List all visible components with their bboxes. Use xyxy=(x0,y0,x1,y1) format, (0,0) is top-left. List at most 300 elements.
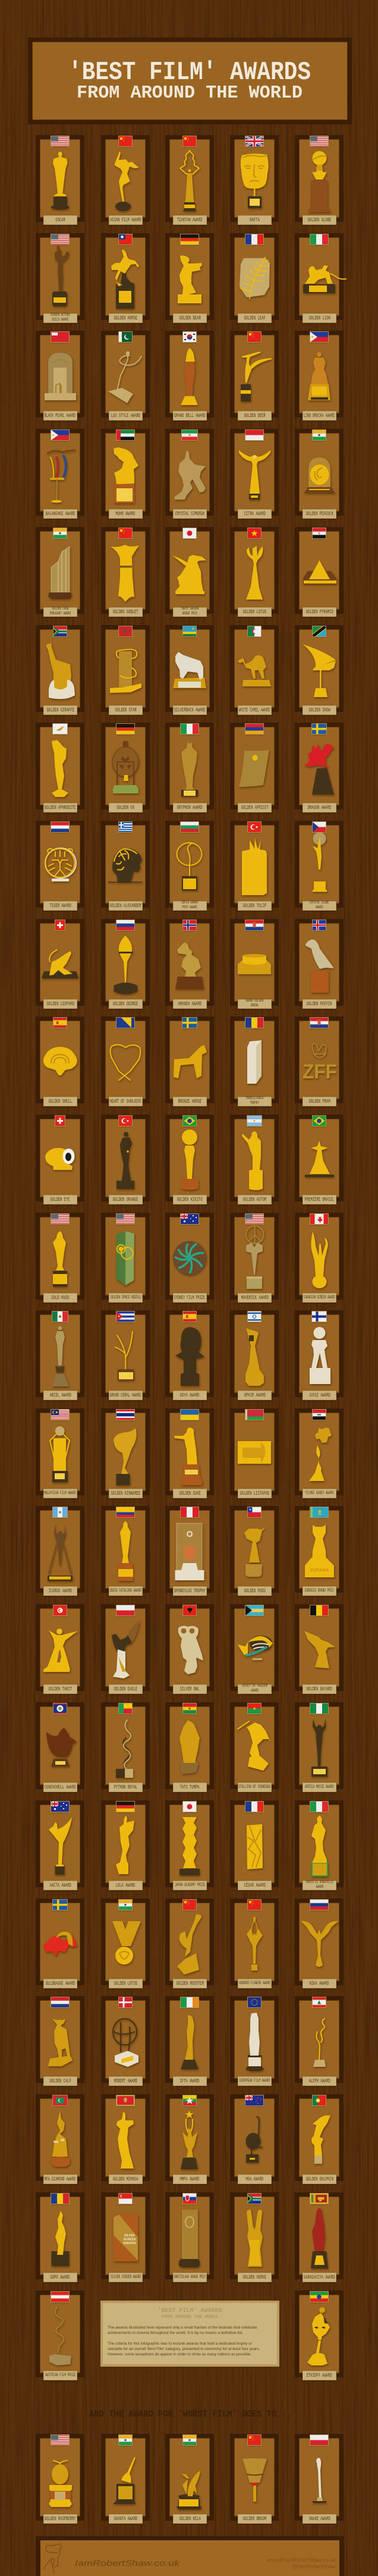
panel: Golden Duke xyxy=(165,1408,214,1495)
label xyxy=(43,1195,77,1204)
label: BAFTA xyxy=(250,217,260,223)
label: GOLDEN ASTOR xyxy=(243,1197,266,1203)
panel: Crystal Globe Award xyxy=(295,821,344,908)
panel: Golden Calf xyxy=(36,1996,84,2083)
trophy: Aleph Award xyxy=(295,1996,344,2083)
label xyxy=(238,607,272,617)
label: GOLDEN DHOW xyxy=(308,707,330,713)
label xyxy=(238,705,272,715)
card heading xyxy=(103,2308,277,2320)
trophy: Golden Star xyxy=(109,648,143,695)
label: GRAND PRIX xyxy=(182,611,197,616)
panel: Austrian Film Prize xyxy=(36,2291,84,2377)
trophy: Golden Deer xyxy=(240,352,273,403)
flag: Netherlands xyxy=(51,1997,69,2007)
label: TIANTAN AWARD xyxy=(177,217,203,223)
label xyxy=(238,215,272,225)
trophy: Jussi Award xyxy=(295,1310,344,1397)
label xyxy=(109,215,143,225)
label: GOLDEN HORSE xyxy=(114,315,137,321)
trophy: Eurasia Grand Prix xyxy=(295,1506,344,1593)
panel: MMPA Award xyxy=(165,2094,214,2181)
panel: Golden Star xyxy=(101,625,150,712)
label: LINO BROCKA AWARD xyxy=(304,413,335,419)
label xyxy=(173,215,207,225)
trophy: David di Donatello Award xyxy=(295,1800,344,1887)
flag: South Africa xyxy=(248,2194,261,2204)
trophy: Tiantan Award xyxy=(179,150,201,213)
trophy: Stallion of Yennenga xyxy=(230,1702,279,1789)
label xyxy=(43,1586,77,1596)
label xyxy=(109,1881,143,1890)
label: TOKYO SAKURA xyxy=(181,607,199,611)
panel: Ariel Award xyxy=(36,1310,84,1397)
label: GOLDEN DUKE xyxy=(179,1491,200,1496)
panel: Golden Dolphin xyxy=(295,2094,344,2181)
panel: Jussi Award xyxy=(295,1310,344,1397)
panel: David di Donatello Award xyxy=(295,1800,344,1887)
label xyxy=(109,803,143,812)
flag: Bahamas xyxy=(245,1605,263,1615)
panel: Golden Apricot xyxy=(230,723,279,809)
flag: Italy xyxy=(310,234,328,244)
label: ETHIOFF AWARD xyxy=(307,2373,332,2379)
label: GOLDEN LION xyxy=(308,315,330,321)
label xyxy=(173,2175,207,2184)
label xyxy=(173,1489,207,1498)
label: CONCHSHELL AWARD xyxy=(45,1784,76,1790)
trophy: Ethioff Award xyxy=(295,2291,344,2377)
trophy: Golden Peacock xyxy=(304,457,336,495)
trophy: Eurasia Grand Prix: EURASIA xyxy=(310,1568,329,1573)
flag: Czech Republic xyxy=(313,822,326,832)
label xyxy=(238,509,272,519)
website: IamRobertShaw.co.uk xyxy=(75,2558,180,2568)
panel: IFTA Award xyxy=(165,1996,214,2083)
panel: Golden Broom xyxy=(230,2434,279,2521)
label xyxy=(109,1195,143,1204)
flag: Australia xyxy=(181,1214,199,1224)
panel: Spirit of Freedom Award xyxy=(230,1604,279,1691)
title text: 'BEST FILM' AWARDS xyxy=(68,58,311,87)
label xyxy=(303,2273,336,2282)
label: GOPO AWARD xyxy=(51,2274,70,2280)
label: SPIRIT OF FREEDOM xyxy=(242,1684,267,1689)
flag: Spain xyxy=(183,1311,196,1322)
title panel xyxy=(28,37,352,124)
flag: India xyxy=(119,1900,132,1910)
panel: Yilmaz Güney Award xyxy=(295,1408,344,1495)
panel: Goya Award xyxy=(165,1310,214,1397)
flag: Benin xyxy=(119,1703,132,1714)
trophy: Dragon Award xyxy=(304,743,335,797)
trophy: Gopo Award xyxy=(36,2192,84,2279)
label: TIGER AWARD xyxy=(49,903,71,909)
label xyxy=(238,411,272,421)
panel: Golden Peacock xyxy=(295,429,344,516)
trophy: Screen Actors Guild Award xyxy=(52,245,70,308)
panel: Golden Shell xyxy=(36,1016,84,1103)
flag: UAE xyxy=(116,430,134,440)
trophy: Snake Award xyxy=(295,2434,344,2521)
label: GOLDEN CROW xyxy=(52,607,68,611)
label xyxy=(109,2514,143,2524)
flag: Italy xyxy=(310,1802,328,1812)
trophy: Ghanta Award xyxy=(101,2434,150,2521)
label: ROBERT AWARD xyxy=(114,2078,137,2084)
flag: Burkina Faso xyxy=(248,1703,261,1714)
flag: Ireland xyxy=(181,1997,199,2007)
label: SILVER SCREEN AWARD xyxy=(111,2274,141,2280)
panel: Golden Dhow xyxy=(295,625,344,712)
flag: Iraq xyxy=(313,1410,326,1420)
flag: USA xyxy=(310,136,328,146)
label: AFRICA MOVIE AWARD xyxy=(305,1784,334,1790)
flag: China xyxy=(248,2435,261,2445)
flag: China xyxy=(248,332,261,342)
label xyxy=(43,509,77,519)
label xyxy=(303,1391,336,1400)
label xyxy=(43,1489,77,1498)
label: GOLDEN PYRAMID xyxy=(305,609,333,615)
trophy: Golden Kela xyxy=(165,2434,214,2521)
trophy: Golden Eagle xyxy=(101,1604,150,1691)
label xyxy=(303,2175,336,2184)
label xyxy=(109,1979,143,1988)
trophy: Golden Tanit xyxy=(36,1604,84,1691)
label xyxy=(173,1293,207,1303)
label xyxy=(238,1586,272,1596)
panel: Golden Aphrodite xyxy=(36,723,84,809)
label xyxy=(173,2273,207,2282)
trophy: César Award xyxy=(230,1800,279,1887)
label: SNAKE AWARD xyxy=(308,2516,330,2522)
panel: Nika Award xyxy=(295,1899,344,1985)
label xyxy=(303,509,336,519)
label xyxy=(109,1586,143,1596)
trophy: Silver Screen Award: AWARDS xyxy=(123,2242,137,2245)
panel: Tokyo Sakura Grand Prix xyxy=(165,527,214,614)
label: GOLDEN GIRAFFE xyxy=(46,707,74,713)
flag: Taiwan xyxy=(119,234,132,244)
panel: Golden Lotus xyxy=(230,527,279,614)
label: MUHR AWARD xyxy=(116,511,136,517)
trophy: Golden Lotus medal xyxy=(101,1899,150,1985)
label xyxy=(303,313,336,323)
trophy: Golden Ox xyxy=(112,741,140,796)
trophy: Crystal Simorgh xyxy=(174,450,207,502)
flag: USA xyxy=(51,234,69,244)
panel: Spondylus Trophy xyxy=(165,1506,214,1593)
trophy: Golden Raspberry xyxy=(36,2434,84,2521)
label: LUX STYLE AWARD xyxy=(111,413,140,419)
label: EURASIA GRAND PRIX xyxy=(305,1588,334,1593)
contact details: email@IamRobertShaw.co.uk xyxy=(267,2557,336,2563)
panel: Aleph Award xyxy=(295,1996,344,2083)
label xyxy=(303,803,336,812)
trophy: Lola Award xyxy=(101,1800,150,1887)
panel: Screen Actors Guild Award xyxy=(36,233,84,320)
flag: India xyxy=(53,528,67,538)
panel: Golden Lion xyxy=(295,233,344,320)
card paragraph two: However, some exceptions do appear in order to show as many nations as possible. xyxy=(108,2352,251,2357)
trophy: Tatu Tumpa xyxy=(165,1702,214,1789)
label: BLACK PEARL AWARD xyxy=(45,413,76,419)
flag: Indonesia xyxy=(245,430,263,440)
trophy: Golden Goblet xyxy=(111,545,140,603)
trophy: Silver Screen Award xyxy=(101,2192,150,2279)
label xyxy=(43,999,77,1009)
trophy: Bratislava Grand Prix xyxy=(165,2192,214,2279)
label: AUSTRIAN FILM PRIZE xyxy=(45,2373,75,2378)
label: GOLDEN ROOSTER xyxy=(176,1981,203,1987)
footer panel xyxy=(36,2536,344,2576)
panel: MOA Award xyxy=(230,2094,279,2181)
label xyxy=(109,509,143,519)
label xyxy=(303,2371,336,2380)
trophy: Sofia Grand Prix Award xyxy=(176,842,204,892)
label xyxy=(303,2514,336,2524)
label: GOLDEN KIKITO xyxy=(177,1197,203,1203)
label xyxy=(303,705,336,715)
flag: Thailand xyxy=(116,1410,134,1420)
label: GULDBAGGE AWARD xyxy=(46,1981,75,1987)
trophy: Nika Award xyxy=(295,1899,344,1985)
label: GOLDEN EYE xyxy=(51,1197,70,1203)
trophy: Ariel Award xyxy=(36,1310,84,1397)
trophy: Lino Brocka Award xyxy=(308,352,332,402)
panel: Golden Astor xyxy=(230,1115,279,1201)
trophy: Silver Screen Award: SILVER xyxy=(124,2234,135,2238)
panel: César Award xyxy=(230,1800,279,1887)
flag: Israel xyxy=(248,1311,261,1322)
flag: Poland xyxy=(116,1605,134,1615)
flag: Slovakia xyxy=(183,2194,196,2204)
trophy: Golden Puffin xyxy=(295,919,344,1006)
label: GOLDEN BEAR xyxy=(179,315,200,321)
label: GOLDEN PUFFIN xyxy=(307,1001,332,1007)
label: AMANDA AWARD xyxy=(178,1001,201,1007)
label: CANADIAN SCREEN AWARD xyxy=(304,1295,335,1300)
label: MFA DIAMOND AWARD xyxy=(45,2176,76,2182)
flag: Poland xyxy=(310,2435,328,2445)
label xyxy=(43,313,77,323)
flag: Russia xyxy=(116,920,134,930)
card paragraph one: achievements in cinema throughout the world. It is by no means a definitive list. xyxy=(108,2331,243,2335)
panel: Oscar xyxy=(36,135,84,222)
flag: China xyxy=(119,136,132,146)
flag: Egypt xyxy=(313,528,326,538)
label xyxy=(173,1783,207,1792)
trophy: Golden Orange xyxy=(101,1115,150,1201)
trophy: Tiger Award xyxy=(44,848,78,884)
flag: Morocco xyxy=(119,626,132,636)
label xyxy=(238,1881,272,1890)
label xyxy=(238,1391,272,1400)
label: BRONZE HORSE xyxy=(178,1099,201,1105)
panel: Golden Lotus (India) xyxy=(101,1899,150,1985)
flag: Philippines xyxy=(51,430,69,440)
panel: Gold Hugo xyxy=(36,1213,84,1300)
panel: White Camel Award xyxy=(230,625,279,712)
label: MMPA AWARD xyxy=(180,2176,200,2182)
trophy: Golden Leaf palm xyxy=(239,257,271,301)
label: CRYSTAL GLOBE xyxy=(310,900,329,905)
label xyxy=(109,607,143,617)
label: GOLDEN LISTAPAD xyxy=(240,1491,269,1496)
label xyxy=(303,215,336,225)
trophy: Spirit of Freedom Award xyxy=(230,1604,279,1691)
flag: Sri Lanka xyxy=(310,2194,328,2204)
label: SARASAVIYA AWARD xyxy=(304,2274,335,2280)
trophy: Silverback Award xyxy=(173,652,207,690)
label: GOLDEN TANIT xyxy=(49,1686,72,1692)
label xyxy=(173,999,207,1009)
flag: Turkey xyxy=(248,822,261,832)
trophy: Japan Academy Prize xyxy=(165,1800,214,1887)
panel: Conchshell Award xyxy=(36,1702,84,1789)
flag: Myanmar xyxy=(183,2095,196,2106)
label xyxy=(109,1097,143,1106)
trophy: BAFTA mask xyxy=(240,153,270,211)
label: HUNDRED FLOWERS AWARD xyxy=(239,1981,270,1986)
panel: Hundred Flowers Award xyxy=(230,1899,279,1985)
panel: Grand Golden Arena xyxy=(230,919,279,1006)
label xyxy=(43,2273,77,2282)
panel: Bratislava Grand Prix xyxy=(165,2192,214,2279)
flag: Denmark xyxy=(119,1997,132,2007)
label: GRAND CORAL AWARD xyxy=(110,1392,141,1398)
trophy: Golden Horse xyxy=(111,250,140,310)
flag: Bolivia xyxy=(183,1703,196,1714)
label: STALLION OF YENNENGA xyxy=(238,1784,270,1790)
label: WHITE CAMEL AWARD xyxy=(239,707,270,713)
label: BALANGHAI AWARD xyxy=(46,511,75,517)
label: GOLDEN HORNS xyxy=(243,2274,266,2280)
trophy: Gold Hugo xyxy=(36,1213,84,1300)
panel: Golden Tanit xyxy=(36,1604,84,1691)
trophy: Golden Dhow xyxy=(303,644,337,699)
panel: Bronze Horse xyxy=(165,1016,214,1103)
label xyxy=(173,313,207,323)
label: GRAND BELL AWARD xyxy=(174,413,206,419)
trophy: Golden Shell xyxy=(36,1016,84,1103)
label: GOLDEN LOTUS xyxy=(243,609,266,615)
label xyxy=(173,1684,207,1694)
label xyxy=(43,1783,77,1792)
label xyxy=(43,1979,77,1988)
label: GOLDEN KINNAREE xyxy=(111,1491,140,1496)
trophy: Ophir Award xyxy=(230,1310,279,1397)
card paragraph one: The awards illustrated here represent only a small fraction of the festivals that celebrate xyxy=(108,2326,257,2330)
label: GOLDEN DOLPHIN xyxy=(305,2176,333,2182)
label: JAPAN ACADEMY PRIZE xyxy=(175,1882,205,1888)
label xyxy=(43,411,77,421)
flag: Finland xyxy=(312,1311,326,1322)
panel: Africa Movie Award xyxy=(295,1702,344,1789)
trophy: Golden Dolphin xyxy=(295,2094,344,2181)
flag: Cyprus xyxy=(53,724,67,734)
label xyxy=(238,1293,272,1303)
panel: Golden Kinnaree xyxy=(101,1408,150,1495)
label xyxy=(173,509,207,519)
trophy: Sydney Film Prize xyxy=(165,1213,214,1300)
flag: Switzerland xyxy=(55,1116,65,1126)
panel: Gopo Award xyxy=(36,2192,84,2279)
label xyxy=(173,705,207,715)
panel: Tiantan Award xyxy=(165,135,214,222)
flag: Germany xyxy=(181,234,199,244)
label: GOLDEN TULIP xyxy=(243,903,266,909)
trophy: Golden Kikito xyxy=(165,1115,214,1201)
label xyxy=(109,1684,143,1694)
panel: Malaysian Film Award xyxy=(36,1408,84,1495)
flag: Japan xyxy=(183,1802,196,1812)
panel: Ophir Award xyxy=(230,1310,279,1397)
label: SYDNEY FILM PRIZE xyxy=(174,1295,206,1301)
flag: Norway xyxy=(183,920,196,930)
title text xyxy=(68,58,311,103)
flag: Mexico xyxy=(52,1311,68,1322)
panel: Golden Leopard xyxy=(36,919,84,1006)
flag: Tanzania xyxy=(313,626,326,636)
card heading: 'BEST FILM' AWARDS xyxy=(158,2308,222,2314)
label: ARIEL AWARD xyxy=(49,1392,71,1398)
panel: Stallion of Yennenga xyxy=(230,1702,279,1789)
label xyxy=(303,901,336,911)
panel: Golden Goblet xyxy=(101,527,150,614)
flag: Sweden xyxy=(312,724,326,734)
panel: Canadian Screen Award xyxy=(295,1213,344,1300)
flag: Ukraine xyxy=(181,1410,199,1420)
card paragraph two xyxy=(108,2341,260,2357)
trophy: Golden Broom xyxy=(230,2434,279,2521)
label xyxy=(238,1783,272,1792)
flag: European Union xyxy=(248,1997,261,2007)
label xyxy=(303,1881,336,1890)
label xyxy=(303,411,336,421)
flag: Spain xyxy=(53,1018,67,1028)
card paragraph two: The criteria for this infographic was to include awards that hold a dedicated trophy or xyxy=(108,2342,252,2346)
panel: Golden Puffin xyxy=(295,919,344,1006)
label: GOLDEN PUDÚ xyxy=(244,1588,265,1594)
label: GOLDEN LOTUS xyxy=(114,1981,137,1987)
label xyxy=(43,1881,77,1890)
flag: Rwanda xyxy=(183,626,196,636)
panel: Golden Raspberry xyxy=(36,2434,84,2521)
label: GOLDEN SPACE NEEDLE xyxy=(111,1295,141,1300)
label: AWARD xyxy=(316,905,323,910)
label: SILVER OWL xyxy=(180,1686,200,1692)
trophy: Grand Golden Arena xyxy=(230,919,279,1006)
flag: Tunisia xyxy=(53,1605,67,1615)
trophy: Golden George xyxy=(101,919,150,1006)
text panel: about xyxy=(100,2301,279,2367)
flag: South Africa xyxy=(53,626,67,636)
label: GOLDEN LEAF xyxy=(244,315,265,321)
flag: China xyxy=(248,1900,261,1910)
label xyxy=(109,1783,143,1792)
flag: Croatia xyxy=(310,1018,328,1028)
trophy: Golden Calf xyxy=(36,1996,84,2083)
trophy: MOA Award xyxy=(230,2094,279,2181)
trophy: Golden Listapad xyxy=(230,1408,279,1495)
label xyxy=(173,411,207,421)
trophy: Silver Screen Award: SCREEN xyxy=(124,2238,136,2241)
contact details: @IamRobertShaw xyxy=(293,2564,336,2569)
trophy: Golden Duke xyxy=(165,1408,214,1495)
trophy: Golden Eye xyxy=(36,1115,84,1201)
